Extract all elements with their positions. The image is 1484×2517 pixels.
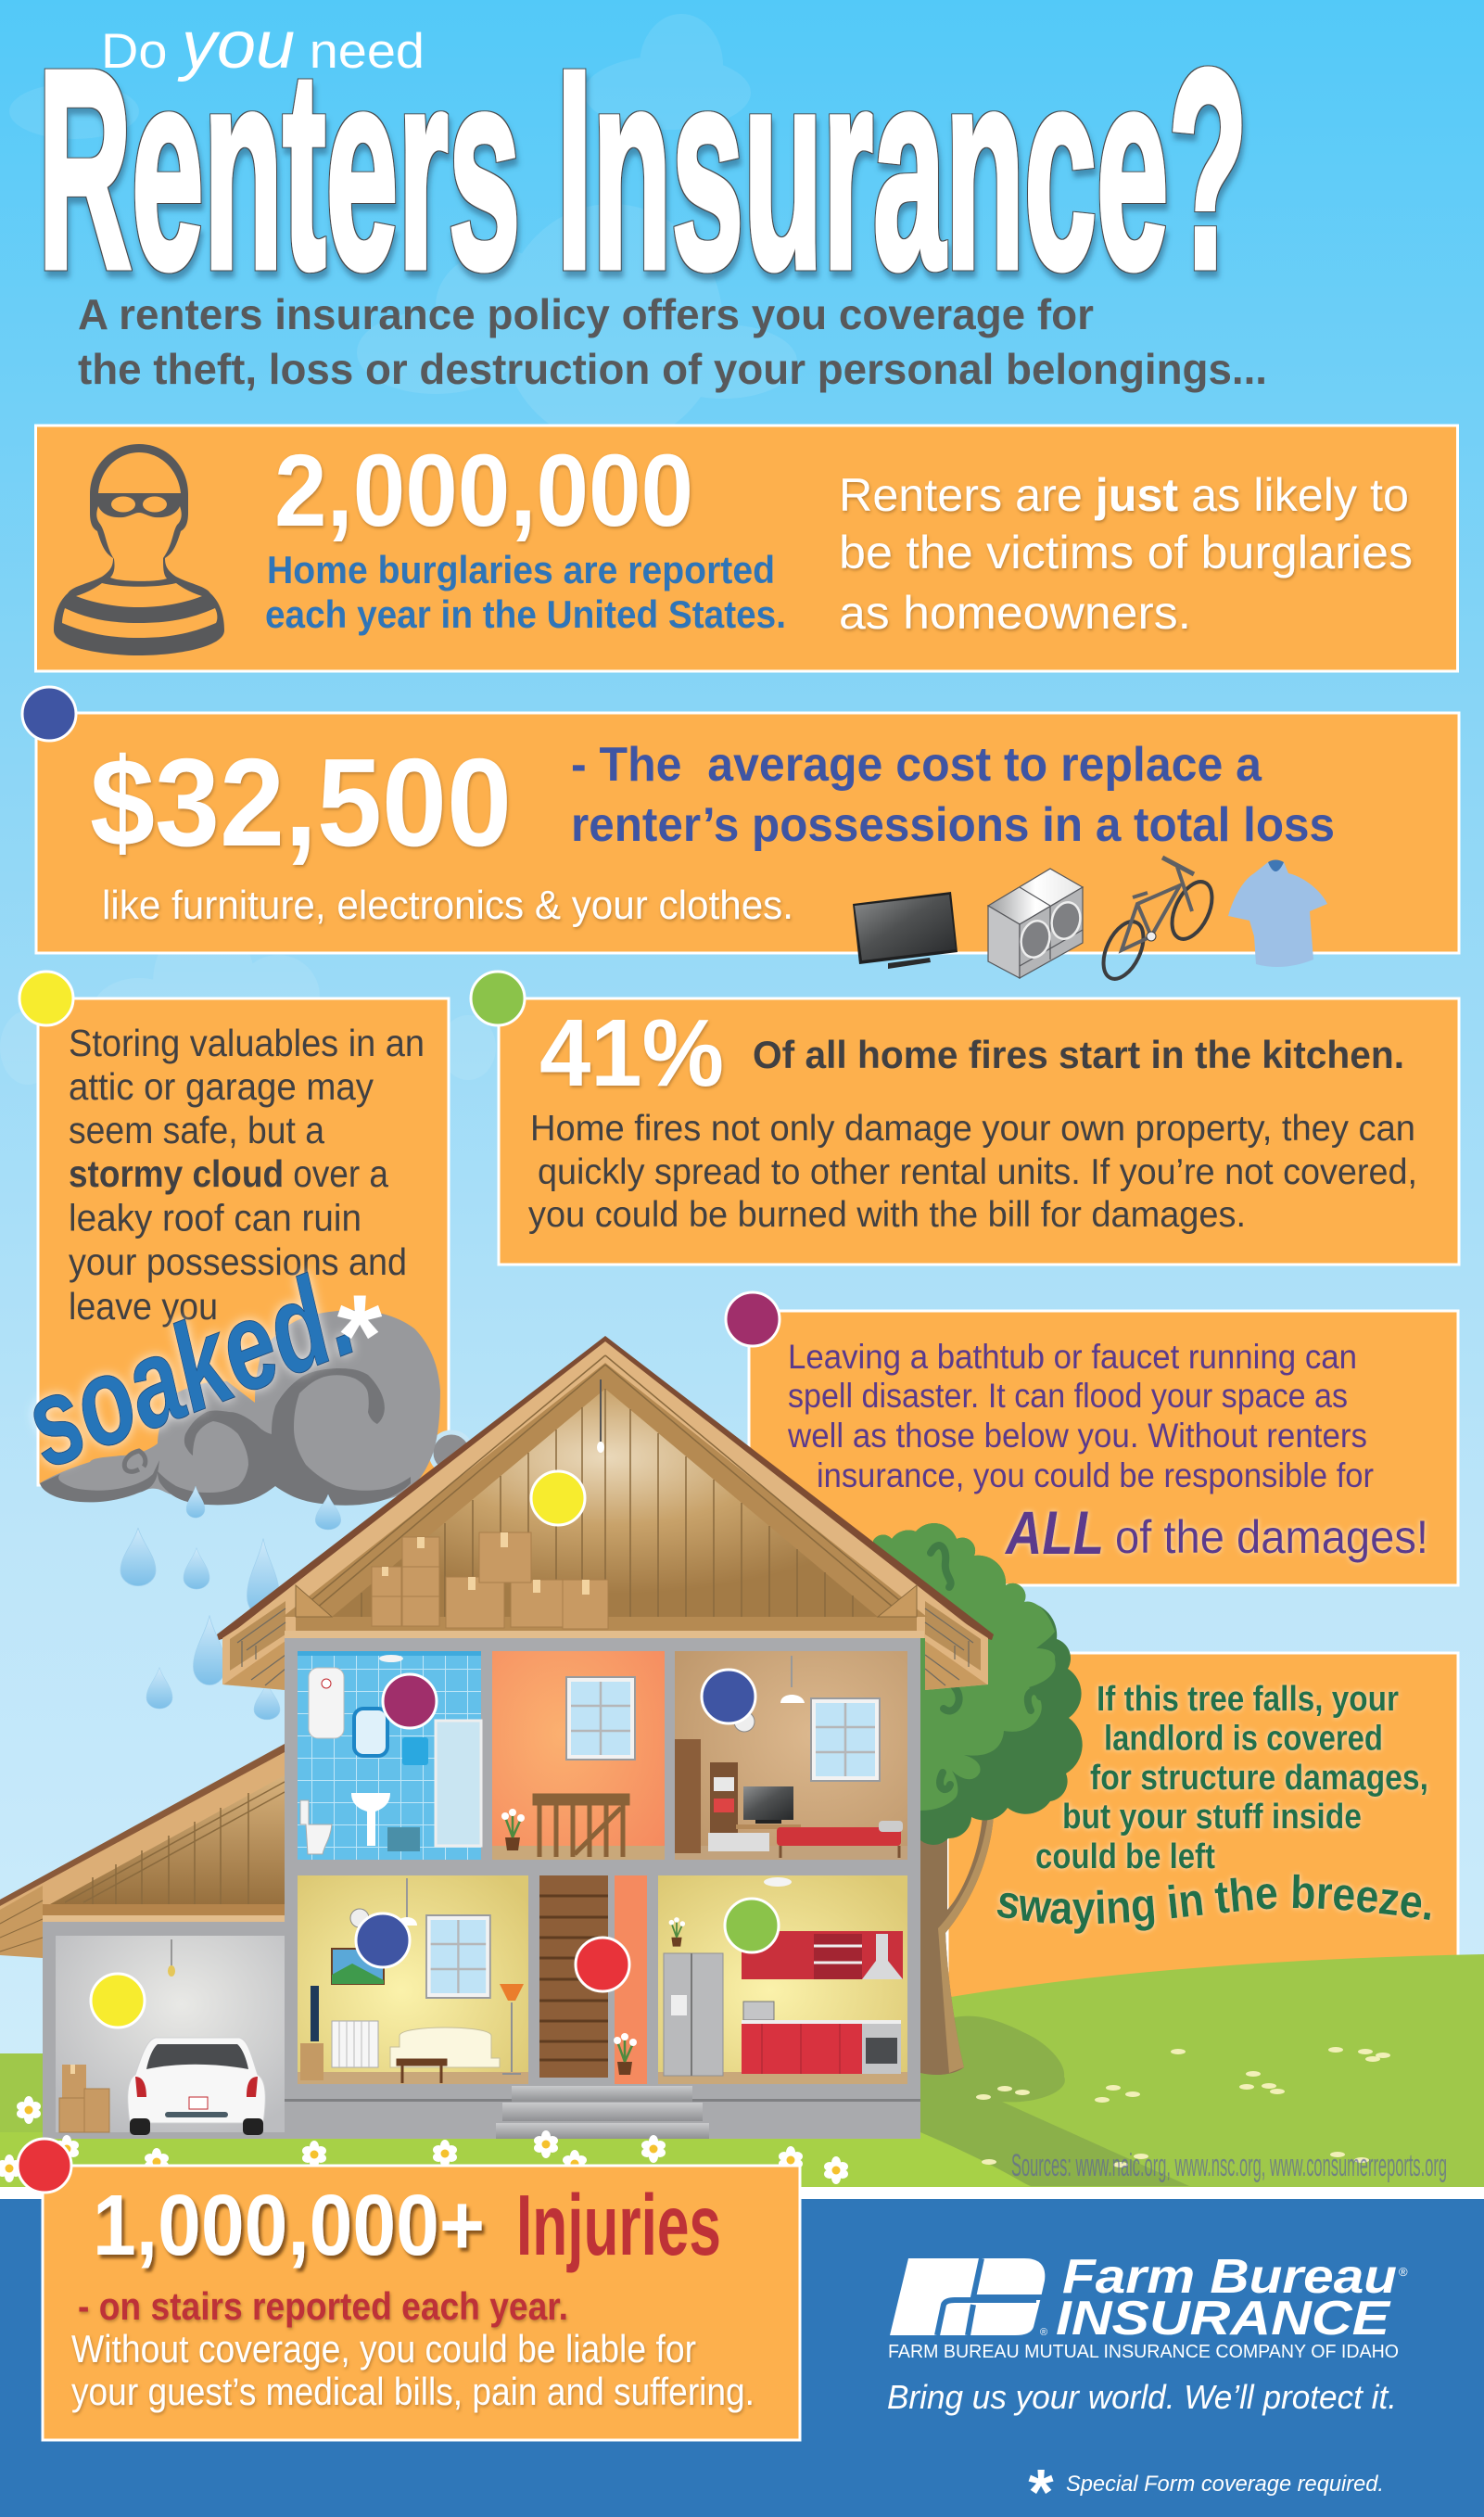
text: liability: your guest’s medical bills, pain and suffering.: [71, 2370, 755, 2413]
room: orange bedroom: [492, 1651, 665, 1860]
text: storing valuables: Storing valuables in an: [69, 1022, 425, 1064]
text: home burglaries: Home burglaries are reported: [267, 548, 775, 591]
front steps: [496, 2086, 709, 2139]
wordmark: Farm Bureau: [1062, 2250, 1397, 2304]
background clouds: [0, 14, 797, 1085]
text: fires body: [528, 1109, 1417, 1235]
footer stripe: [0, 2187, 1484, 2199]
text: storing valuables: [69, 1022, 425, 1328]
wordmark: INSURANCE: [1056, 2292, 1391, 2345]
text: home burglaries: each year in the United States.: [265, 592, 786, 636]
wordmark: [1040, 2250, 1408, 2345]
text: flood warning: ALL: [1004, 1498, 1104, 1567]
panel: stormy cloud: [38, 998, 449, 1485]
icon: attic bulb: [597, 1379, 604, 1453]
room: kitchen: [658, 1875, 907, 2084]
company name: FARM BUREAU MUTUAL INSURANCE COMPANY OF IDAHO: [888, 2342, 1399, 2362]
heading: injuries: Injuries: [516, 2177, 721, 2273]
icon: bicycle: [1096, 858, 1220, 985]
text: storing valuables: leaky roof can ruin: [69, 1196, 361, 1239]
text: storing valuables: stormy cloud over a: [69, 1152, 388, 1195]
attic boxes: [372, 1532, 608, 1629]
icon: white car: [128, 2038, 265, 2135]
text: fires body: quickly spread to other rental units. If you’re not covered,: [538, 1152, 1417, 1192]
text: tree warning: landlord is covered: [1104, 1719, 1383, 1758]
wordmark: ®: [1040, 2327, 1047, 2338]
stat: $32,500: $32,500: [90, 732, 512, 872]
text: renters are just as likely: Renters are just as likely to: [839, 469, 1409, 521]
header: [38, 8, 1267, 393]
roof and attic: [217, 1336, 994, 1690]
text: furniture, electronics and clothes: like furniture, electronics & your clothes.: [102, 883, 793, 928]
tagline: Bring us your world. We’ll protect it.: [887, 2378, 1397, 2416]
text: storing valuables: seem safe, but a: [69, 1109, 324, 1151]
panel: burglaries: [35, 426, 1457, 671]
text: renters are just as likely: as homeowners.: [839, 587, 1191, 639]
text: storing valuables: your possessions and: [69, 1240, 407, 1283]
text: tree warning: for structure damages,: [1090, 1759, 1428, 1798]
text: flood warning: of the damages!: [1115, 1511, 1428, 1563]
subtitle: the theft, loss or destruction of your personal belongings...: [78, 345, 1267, 393]
icon: FB mark: [890, 2258, 1045, 2335]
panel: tree: [947, 1653, 1458, 2005]
wordmark: ®: [1399, 2265, 1408, 2279]
panel: stair injuries: [43, 2166, 800, 2440]
stat: 41%: 41%: [539, 999, 724, 1106]
panel: flood: [749, 1311, 1458, 1585]
text: flood warning: Leaving a bathtub or faucet running can: [788, 1338, 1357, 1376]
icon: garage light: [168, 1939, 175, 1977]
room: bathroom: [298, 1651, 481, 1860]
tree: [873, 1523, 1083, 2075]
text: renters are just as likely: [839, 469, 1413, 639]
icon: garage boxes: [59, 2065, 109, 2132]
icon: television: [853, 892, 958, 969]
icon: asterisk: *: [337, 1272, 383, 1401]
panel: home fires: [499, 998, 1459, 1265]
text: liability: [71, 2327, 755, 2413]
garage: [0, 1744, 285, 2139]
text: flood warning: well as those below you. Without renters: [787, 1417, 1367, 1455]
lawn flowers: [0, 2047, 1390, 2184]
icon: washer and dryer: [988, 869, 1084, 978]
stat: 2,000,000: 2,000,000: [274, 434, 693, 548]
text: soaked: soaked.: [6, 1242, 372, 1494]
text: tree warning: [994, 1680, 1433, 1938]
footnote: [1028, 2456, 1384, 2517]
text: fires body: Home fires not only damage your own property, they can: [530, 1109, 1415, 1149]
room: living room: [298, 1875, 528, 2084]
grass hill: [0, 1954, 1484, 2188]
cloud: [40, 1310, 472, 1506]
footnote: Special Form coverage required.: [1066, 2472, 1384, 2497]
icon: polo shirt: [1228, 860, 1327, 967]
subtitle: A renters insurance policy offers you coverage for: [78, 290, 1094, 338]
kicker: do you need: Do you need: [101, 8, 425, 83]
raindrops: [120, 1486, 341, 1720]
text: kitchen fires: Of all home fires start in the kitchen.: [753, 1033, 1404, 1076]
stat: 1,000,000+: 1,000,000+: [93, 2177, 485, 2273]
colored location markers: [18, 687, 780, 2193]
house: [217, 1336, 994, 2139]
text: average cost: renter’s possessions in a total loss: [571, 798, 1335, 852]
text: storing valuables: leave you: [69, 1285, 218, 1328]
room: staircase: [539, 1875, 647, 2084]
footer band: [0, 2199, 1484, 2517]
text: liability: Without coverage, you could be liable for: [71, 2327, 696, 2371]
text: home burglaries: [265, 548, 786, 636]
text: tree warning: could be left: [1035, 1837, 1215, 1876]
panel: replacement cost: [36, 713, 1459, 985]
text: average cost: [571, 738, 1335, 852]
logo: Farm Bureau Insurance: [887, 2250, 1408, 2416]
text: flood warning: [787, 1338, 1428, 1567]
text: renters are just as likely: be the victims of burglaries: [839, 527, 1413, 578]
text: tree warning: but your stuff inside: [1062, 1798, 1362, 1837]
text: tree warning: swaying in the breeze.: [994, 1871, 1433, 1938]
house body: [285, 1638, 920, 2139]
room: tan bedroom: [675, 1651, 907, 1860]
text: on stairs: - on stairs reported each year.: [78, 2284, 568, 2328]
text: fires body: you could be burned with the bill for damages.: [528, 1195, 1246, 1235]
text: tree warning: If this tree falls, your: [1097, 1680, 1399, 1719]
text: average cost: - The average cost to replace a: [571, 738, 1262, 792]
text: storing valuables: attic or garage may: [69, 1065, 374, 1108]
text: flood warning: insurance, you could be responsible for: [817, 1456, 1374, 1494]
text: flood warning: spell disaster. It can flood your space as: [788, 1377, 1348, 1415]
icon: masked burglar: [54, 444, 224, 655]
subtitle: [78, 290, 1267, 393]
